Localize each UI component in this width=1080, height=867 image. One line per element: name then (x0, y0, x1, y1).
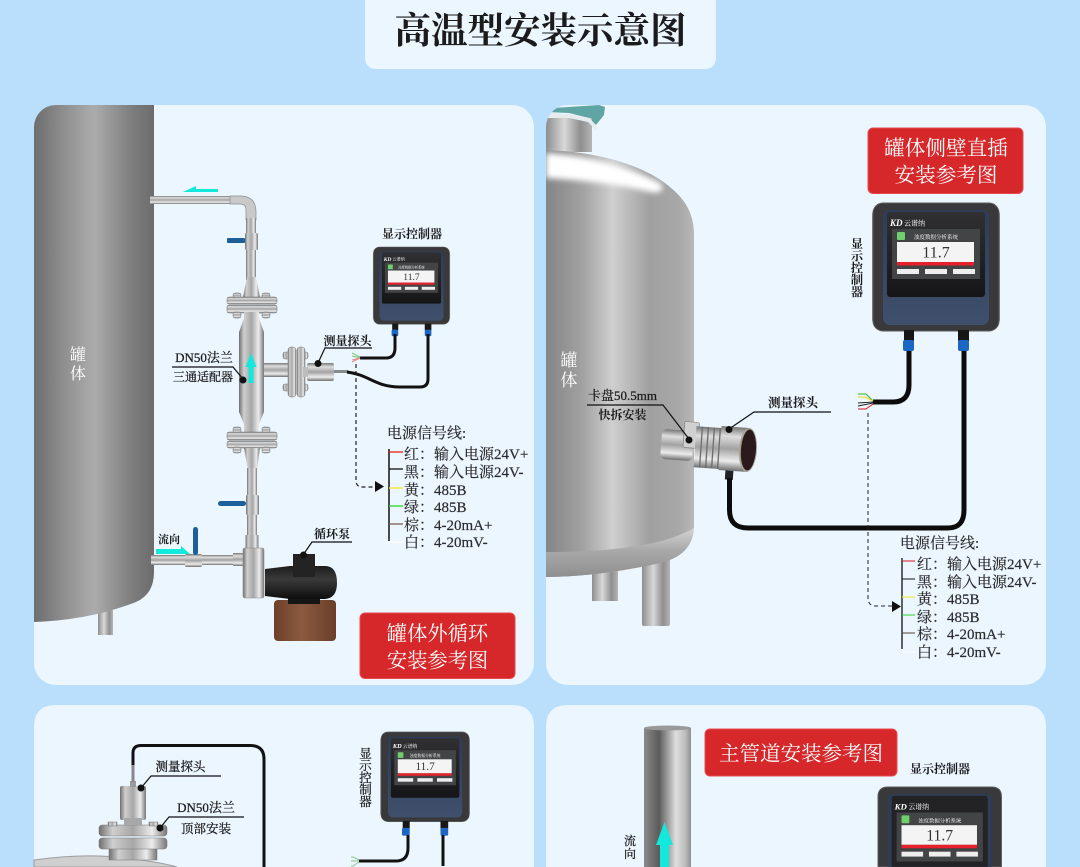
branch and side flange (264, 363, 288, 377)
circulation pump (243, 548, 337, 604)
label: probe: 测量探头 (155, 759, 206, 774)
flow direction label: 流 (624, 833, 636, 848)
controller: 11.7 (922, 244, 950, 262)
wire list: 485B (947, 592, 980, 608)
title (365, 0, 716, 69)
valve handle upper (227, 238, 245, 243)
label: pump: 循环泵 (314, 526, 350, 541)
wire list: 4-20mA+ (434, 518, 492, 534)
red label: main pipe (705, 729, 897, 776)
wire list (900, 534, 1041, 661)
controller: 云谱纳 (908, 802, 929, 811)
controller: 11.7 (416, 761, 435, 773)
wire list: 绿： (404, 499, 434, 516)
tank body (34, 105, 154, 622)
label: clamp: 卡盘50.5mm (588, 388, 657, 403)
label: controller vertical: 显 (359, 747, 372, 761)
controller cables (351, 835, 443, 866)
label: controller vertical: 控 (359, 770, 372, 785)
wire list: 绿： (917, 609, 947, 626)
lower flange (227, 427, 277, 453)
label: controller vertical: 示 (851, 249, 864, 263)
controller: KD (383, 257, 391, 263)
wire list: 电源信号线: (900, 534, 979, 552)
red label: external circulation: 罐体外循环 (387, 622, 489, 646)
circulation pipework (150, 196, 308, 549)
wire list: 输入电源24V+ (947, 555, 1041, 573)
red label: external circulation (360, 613, 515, 678)
controller: 11.7 (926, 827, 953, 844)
wire list: 黑： (404, 464, 434, 481)
label: controller vertical: 器 (851, 285, 863, 299)
label: flange: DN50法兰 (177, 800, 235, 815)
label: controller vertical: 显 (851, 236, 863, 251)
wire list: 红： (917, 556, 947, 573)
controller: KD (392, 743, 402, 750)
return flow arrow (183, 186, 218, 192)
controller: 浊度数据分析系统 (398, 265, 425, 270)
panel: main pipe (546, 705, 1046, 867)
label: clamp (587, 388, 692, 444)
flow arrow (656, 822, 673, 867)
wire list: 485B (434, 483, 467, 499)
wire list: 棕： (404, 516, 434, 534)
red label: external circulation: 安装参考图 (387, 650, 488, 672)
controller (380, 732, 470, 836)
label: controller: 显示控制器 (910, 761, 970, 776)
panel: tank external circulation (34, 105, 534, 685)
controller: KD (894, 802, 908, 812)
controller: 云谱纳 (392, 256, 406, 263)
red label: side insertion: 罐体侧壁直插 (884, 137, 1008, 160)
tank body (546, 150, 694, 577)
controller: KD (889, 218, 903, 228)
flange and probe (99, 765, 167, 860)
label: controller vertical: 示 (359, 759, 372, 773)
wire list: 输入电源24V- (947, 573, 1036, 591)
label: flange (156, 800, 244, 836)
wire list: 485B (434, 500, 467, 516)
wire list: 棕： (917, 625, 947, 643)
wire list: 黑： (917, 574, 947, 591)
title: 高温型安装示意图 (394, 10, 686, 51)
controller (878, 787, 1001, 867)
panel: tank side wall insertion (546, 105, 1046, 685)
inlet flow arrow (156, 546, 190, 554)
measuring probe (303, 363, 348, 381)
label: controller: 显示控制器 (382, 226, 442, 241)
label: probe (138, 759, 221, 792)
flow arrow on tee (246, 353, 256, 383)
wire list: 输入电源24V+ (434, 445, 528, 463)
flow direction label: 向 (624, 847, 636, 861)
cable to wire bundle (858, 350, 909, 409)
controller: 云谱纳 (904, 218, 925, 228)
panel: top mounting (34, 705, 534, 867)
label: probe: 测量探头 (323, 333, 372, 348)
main pipe (644, 726, 691, 867)
wire list: 黄： (404, 481, 434, 499)
wire list: 4-20mV- (434, 535, 488, 551)
controller (872, 203, 1000, 351)
wire list: 红： (404, 446, 434, 463)
wire list: 白： (404, 534, 434, 551)
wood base (274, 600, 336, 641)
label: controller vertical: 制 (851, 272, 863, 287)
label: probe (314, 333, 372, 367)
label: controller vertical: 制 (359, 782, 372, 797)
wire list: 4-20mA+ (947, 627, 1005, 643)
label: controller vertical: 器 (359, 795, 372, 809)
cable to wire bundle (352, 334, 395, 362)
label: probe (726, 395, 831, 433)
label: controller vertical: 控 (851, 260, 863, 275)
tank legs (592, 555, 670, 626)
cable from probe (347, 334, 428, 387)
label: flange adapter: 三通适配器 (173, 370, 233, 384)
valve handle middle (218, 501, 246, 506)
wire list: 电源信号线: (387, 424, 466, 442)
label: probe: 测量探头 (768, 395, 819, 410)
flow direction label: 流向 (158, 532, 180, 546)
controller: 浊度数据分析系统 (410, 753, 441, 758)
cable from probe to controller (730, 350, 964, 528)
tee body (239, 312, 264, 433)
dashed leader to wire list (868, 413, 901, 612)
controller: 11.7 (403, 272, 420, 283)
tank leg (98, 610, 113, 635)
tank dome (34, 856, 177, 867)
wire list: 黄： (917, 590, 947, 608)
tank body: 罐 (560, 351, 578, 370)
controller: 浊度数据分析系统 (918, 816, 962, 824)
red label: side insertion: 安装参考图 (895, 164, 997, 187)
wire list: 4-20mV- (947, 645, 1001, 661)
wire list: 485B (947, 610, 980, 626)
wire list (387, 424, 528, 551)
controller: 云谱纳 (403, 743, 417, 750)
probe cable (133, 746, 264, 867)
controller (373, 247, 450, 336)
label: pump (300, 526, 352, 558)
label: flange adapter (172, 350, 246, 384)
wire list: 白： (917, 644, 947, 661)
label: clamp: 快拆安装 (598, 407, 647, 422)
tank body: 体 (70, 365, 86, 383)
wire list: 输入电源24V- (434, 463, 523, 481)
upper flange (227, 293, 277, 318)
inlet pipe with valve (151, 527, 244, 567)
red label: side insertion (868, 128, 1023, 194)
tank body: 体 (560, 371, 578, 390)
probe on tank wall (659, 420, 759, 482)
label: flange adapter: DN50法兰 (175, 350, 233, 365)
controller: 浊度数据分析系统 (914, 233, 958, 241)
red label: main pipe: 主管道安装参考图 (719, 742, 883, 766)
tank top fitting (546, 105, 605, 152)
tank body: 罐 (70, 345, 86, 364)
dashed leader to wire list (356, 364, 384, 492)
label: flange: 顶部安装 (181, 821, 231, 836)
